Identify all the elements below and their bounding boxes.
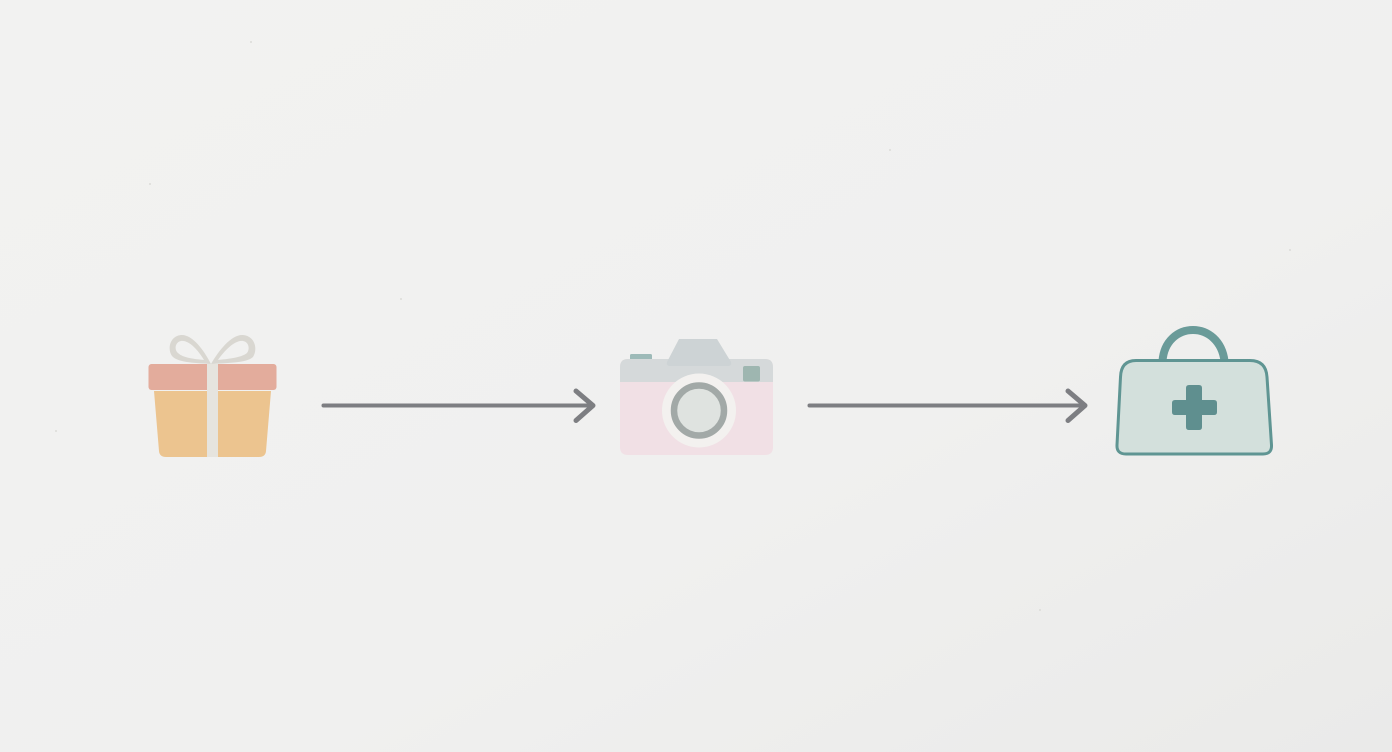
gift bow (170, 335, 255, 364)
camera prism (667, 339, 731, 366)
gift lid (148, 364, 276, 390)
camera body (620, 359, 773, 455)
arrow: gift to camera (324, 391, 593, 420)
camera lens (662, 374, 736, 448)
icon: camera (620, 339, 773, 455)
medical cross (1172, 385, 1217, 430)
camera shutter button (630, 354, 652, 361)
gift box body (154, 391, 271, 457)
bag handle (1162, 330, 1224, 361)
arrow: camera to medical bag (810, 391, 1085, 420)
camera viewfinder (743, 366, 760, 382)
icon: gift box (148, 335, 276, 457)
bag body (1117, 360, 1272, 454)
gift ribbon (207, 364, 218, 457)
camera top plate (620, 359, 773, 382)
icon: medical bag (1117, 330, 1272, 454)
